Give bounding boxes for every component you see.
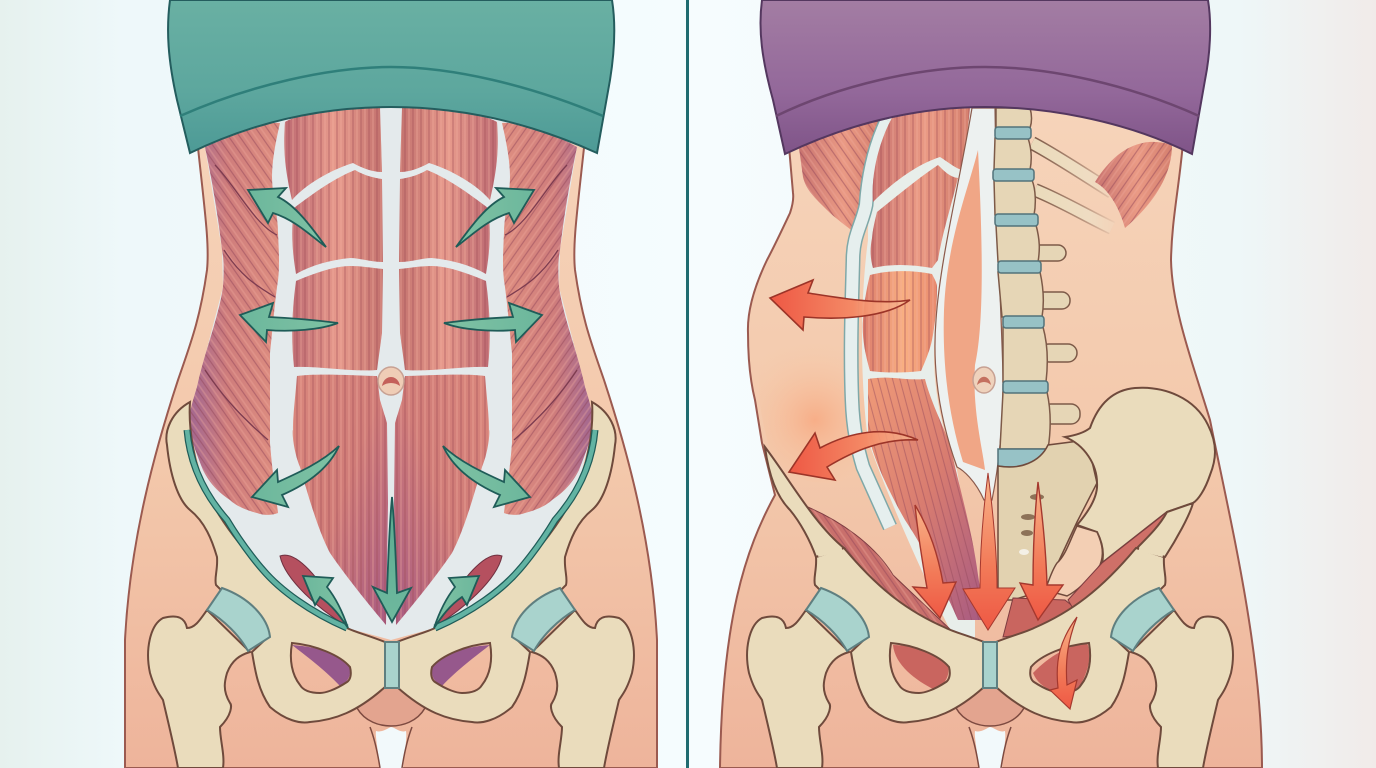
fibres over lower rectus: [868, 378, 985, 620]
right pelvic muscle strip: [1068, 512, 1167, 612]
sacrum: [998, 440, 1097, 600]
intervertebral discs: [993, 127, 1048, 467]
top garment teal: [168, 0, 614, 153]
pubic symphysis: [983, 642, 997, 688]
side tendon stripe outline: [851, 120, 890, 527]
obturator muscle left: [893, 645, 948, 690]
navel centre: [977, 377, 991, 385]
top garment purple: [760, 0, 1210, 154]
green arrows left: [240, 188, 348, 628]
side tendon stripe: [851, 120, 890, 527]
rectus muscle side: [863, 108, 985, 620]
navel centre: [382, 377, 400, 386]
sacral holes: [1019, 494, 1044, 555]
pelvis and band right: [397, 402, 616, 722]
pubic mound: [357, 680, 425, 726]
pelvic opening: [1045, 526, 1102, 596]
inner fascia: [944, 150, 985, 470]
rectus top segment: [873, 108, 970, 202]
red arrow: down right: [1020, 482, 1063, 620]
fibres over rectus: [863, 108, 970, 372]
downward green arrow: [373, 497, 411, 622]
upper right muscle fibres: [1095, 142, 1172, 228]
background: left panel: [0, 0, 687, 768]
rectus lower segment: [868, 378, 985, 620]
linea alba side: [935, 108, 1003, 500]
left lower muscle strip: [803, 505, 953, 632]
pelvis and band left: [166, 402, 385, 722]
pelvic hole tissue left: [292, 645, 350, 686]
muscles right side: [391, 108, 594, 640]
oblique fibres: [799, 120, 880, 233]
upper right muscle: [1095, 142, 1172, 228]
pubic symphysis: [385, 642, 399, 688]
inner thigh creases: [969, 727, 1011, 768]
vertebral bodies: [996, 108, 1032, 128]
spine: [994, 108, 1112, 449]
inner thigh creases: [370, 727, 412, 768]
ilium bone: [1065, 388, 1215, 563]
bulging belly glow: [759, 330, 865, 483]
obturator muscle right: [1033, 643, 1089, 695]
red arrow: down centre: [963, 473, 1015, 630]
rectus second segment: [871, 165, 958, 268]
rectus third segment: [863, 271, 937, 372]
pelvic ring right: [996, 548, 1166, 722]
panel: weakened abdomen: [720, 0, 1262, 768]
muscles left side: [188, 108, 391, 640]
red arrow: upper outward: [770, 280, 910, 330]
gap between thighs: [975, 727, 1005, 768]
pelvic hole tissue right: [432, 645, 490, 686]
femur right: [512, 588, 634, 768]
spinous processes: [1030, 245, 1066, 261]
femur left: [148, 588, 270, 768]
pubic mound: [956, 680, 1024, 726]
central pelvic floor muscle: [1003, 598, 1075, 637]
left lower muscle fibres: [803, 505, 953, 632]
gap between thighs: [376, 727, 406, 768]
pelvic ring left: [814, 548, 984, 722]
right pelvis strip: [1137, 503, 1193, 557]
left pelvis strip: [765, 447, 844, 557]
divider line: [686, 0, 689, 768]
background: right panel: [687, 0, 1376, 768]
navel: [973, 367, 995, 393]
long ribs: [1032, 143, 1112, 192]
panel: healthy abdomen: [125, 0, 657, 768]
femur left: [747, 588, 869, 768]
garment band seam: [776, 67, 1199, 116]
body skin: [125, 100, 657, 768]
body skin side view: [720, 100, 1262, 768]
red arrow: pelvic floor: [1050, 617, 1077, 709]
femur right: [1111, 588, 1233, 768]
red arrow: lower outward: [789, 432, 918, 480]
rectus base tendon layer: [862, 108, 975, 640]
red arrow: down left: [913, 505, 956, 618]
green arrows right: [434, 188, 542, 628]
upper oblique: [799, 120, 880, 233]
navel: [378, 367, 404, 395]
garment band seam: [180, 67, 603, 116]
